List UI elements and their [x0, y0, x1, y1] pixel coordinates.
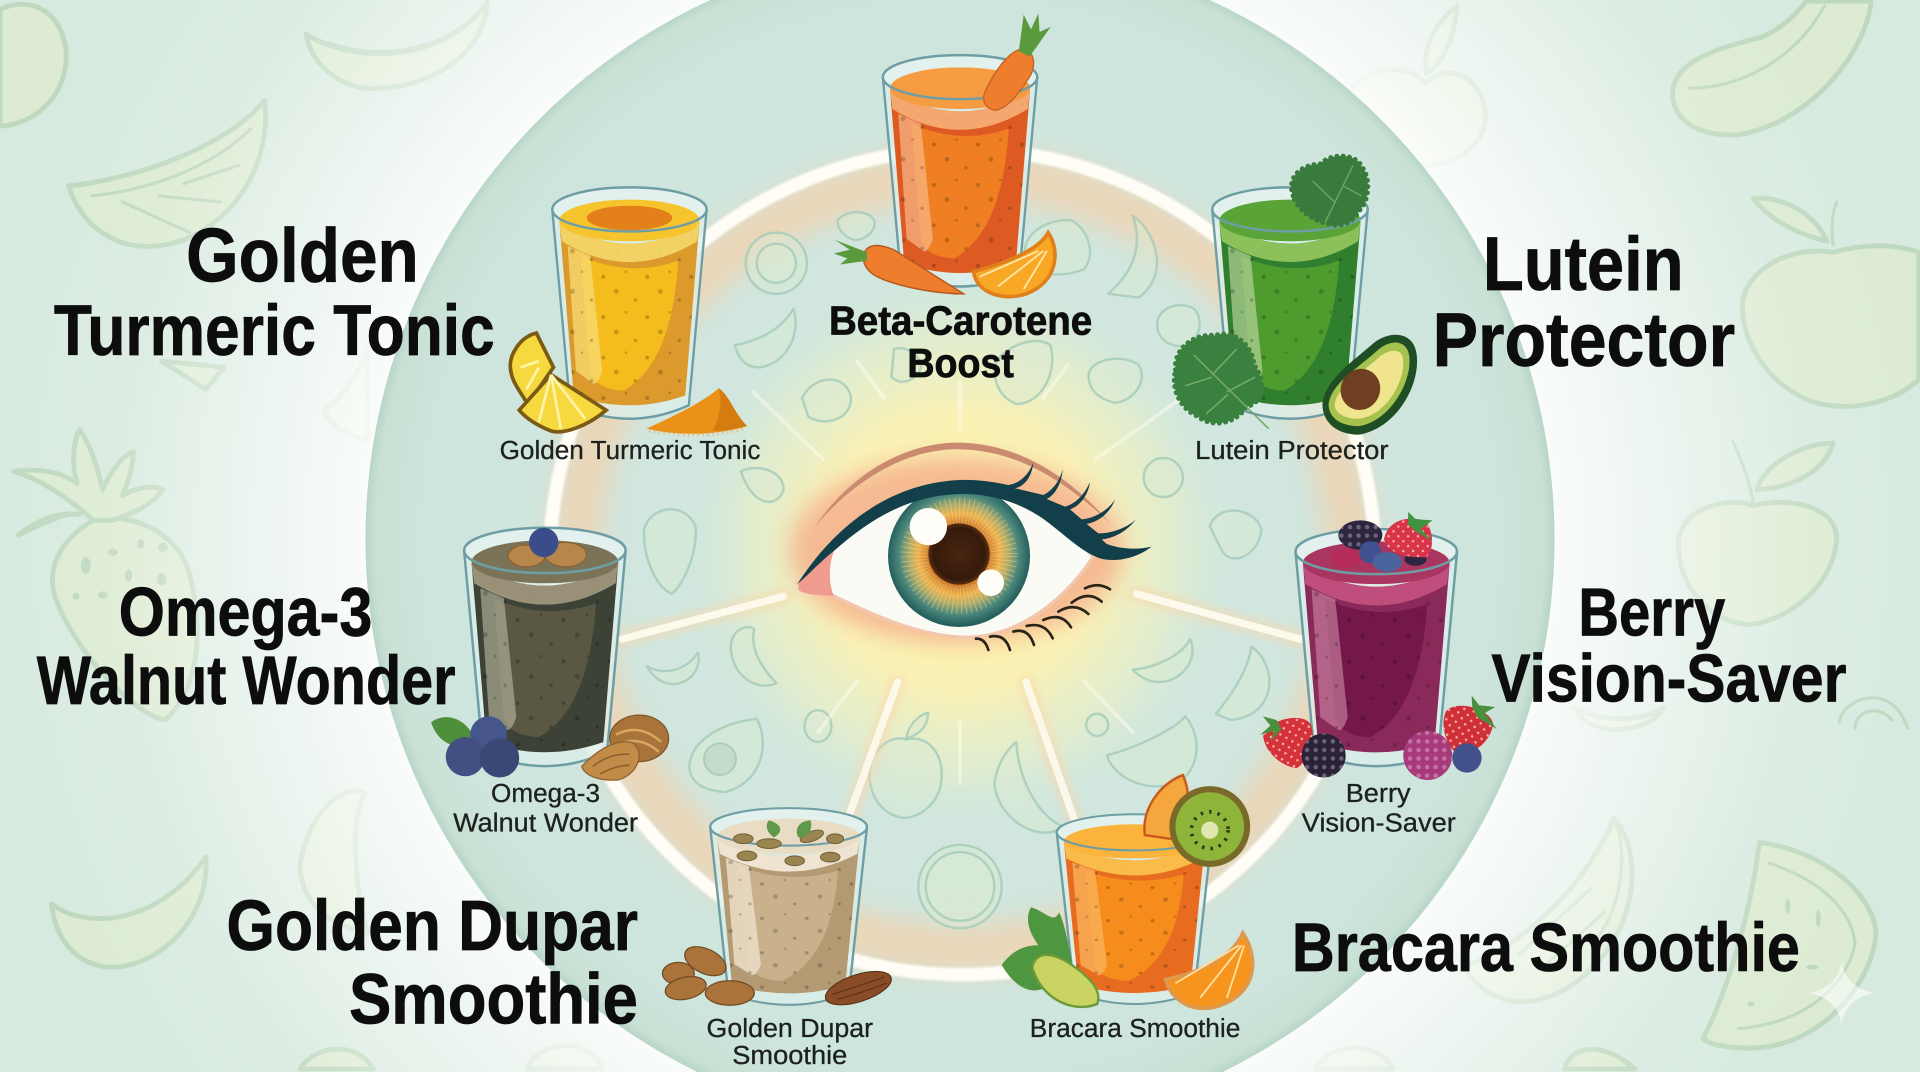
central disc	[366, 0, 1554, 1072]
central radial glow	[685, 275, 1235, 826]
title: Lutein Protector: Lutein	[1483, 222, 1684, 307]
glass	[1057, 814, 1212, 1004]
kale leaf bottom	[1174, 334, 1269, 429]
kiwi	[1169, 786, 1250, 867]
glass	[552, 187, 707, 419]
label: Golden Turmeric Tonic	[500, 437, 761, 465]
ring glow	[576, 175, 1349, 949]
iris highlights	[910, 508, 947, 545]
strawberry right	[1435, 690, 1504, 763]
label: Beta-Carotene	[829, 297, 1092, 343]
label: Berry	[1346, 780, 1411, 808]
iris	[888, 485, 1030, 627]
raspberry	[1403, 731, 1452, 780]
drink: Beta-Carotene Boost	[829, 13, 1092, 386]
upper lid and lashes	[797, 463, 1152, 584]
inner corner	[798, 548, 835, 596]
eye peach halo	[790, 457, 1123, 643]
drink: Lutein Protector	[1174, 156, 1417, 465]
label: Walnut Wonder	[453, 809, 638, 837]
top berries	[1331, 512, 1433, 572]
label: Vision-Saver	[1302, 809, 1456, 837]
title: Omega-3 Walnut Wonder: Walnut Wonder	[37, 642, 456, 719]
almonds left	[662, 941, 754, 1005]
title: Bracara Smoothie: Bracara Smoothie	[1292, 909, 1800, 986]
avocado	[1322, 335, 1417, 435]
label: Omega-3	[491, 780, 600, 808]
almond right	[822, 965, 895, 1012]
drink: Golden Turmeric Tonic	[500, 187, 761, 465]
title: Lutein Protector	[1433, 222, 1735, 383]
seeds and leaves topping	[733, 820, 844, 866]
title: Golden Turmeric Tonic: Turmeric Tonic	[54, 292, 495, 371]
drink: Berry Vision-Saver	[1256, 512, 1504, 837]
green fruit slice	[1032, 955, 1098, 1007]
title: Berry Vision-Saver: Berry	[1578, 575, 1726, 650]
orange slice	[1166, 933, 1253, 1008]
orange slice	[973, 233, 1055, 297]
title: Golden Turmeric Tonic	[54, 214, 495, 371]
label	[1302, 780, 1456, 837]
title: Lutein Protector: Protector	[1433, 298, 1735, 383]
turmeric powder	[647, 388, 747, 435]
title: Golden Dupar Smoothie: Golden Dupar	[227, 887, 638, 966]
label: Smoothie	[732, 1042, 847, 1070]
toppings	[508, 528, 587, 567]
label	[829, 297, 1092, 386]
light rays	[622, 361, 1300, 863]
blueberry	[1452, 743, 1482, 773]
glass	[464, 528, 626, 766]
eye white	[798, 485, 1093, 637]
glass	[883, 55, 1037, 287]
central eye	[790, 443, 1152, 650]
glass	[710, 808, 867, 1005]
inner fruit outlines	[644, 212, 1269, 928]
glass	[1295, 529, 1457, 766]
icon: sparkle watermark	[1809, 962, 1875, 1024]
leaves	[1002, 907, 1078, 990]
label: Lutein Protector	[1195, 437, 1389, 465]
kale leaf top	[1291, 156, 1368, 225]
label	[707, 1015, 874, 1070]
eyebrow crease	[815, 443, 1110, 527]
glass	[1212, 187, 1368, 419]
label: Bracara Smoothie	[1030, 1015, 1240, 1043]
carrot	[834, 240, 964, 294]
pineapple	[510, 333, 606, 432]
title: Berry Vision-Saver: Vision-Saver	[1491, 642, 1846, 717]
title: Golden Dupar Smoothie: Smoothie	[349, 961, 638, 1040]
light ring	[550, 149, 1375, 975]
strawberry left	[1256, 705, 1321, 775]
lower lashes	[976, 585, 1110, 650]
walnuts	[582, 715, 669, 780]
drink: Golden Dupar Smoothie	[662, 808, 895, 1070]
label	[453, 780, 638, 837]
title: Omega-3 Walnut Wonder: Omega-3	[119, 573, 372, 650]
label: Golden Dupar	[707, 1015, 874, 1043]
label: Boost	[907, 340, 1014, 386]
title: Golden Turmeric Tonic: Golden	[186, 214, 419, 299]
title: Golden Dupar Smoothie	[227, 887, 638, 1040]
title: Omega-3 Walnut Wonder	[37, 573, 456, 719]
title: Berry Vision-Saver	[1491, 575, 1846, 717]
drink: Bracara Smoothie	[1002, 775, 1253, 1043]
carrot in glass	[984, 13, 1051, 110]
blackberry	[1302, 733, 1346, 778]
drink: Omega-3 Walnut Wonder	[431, 528, 669, 837]
blueberries	[431, 716, 519, 778]
peach slice	[1144, 775, 1188, 840]
